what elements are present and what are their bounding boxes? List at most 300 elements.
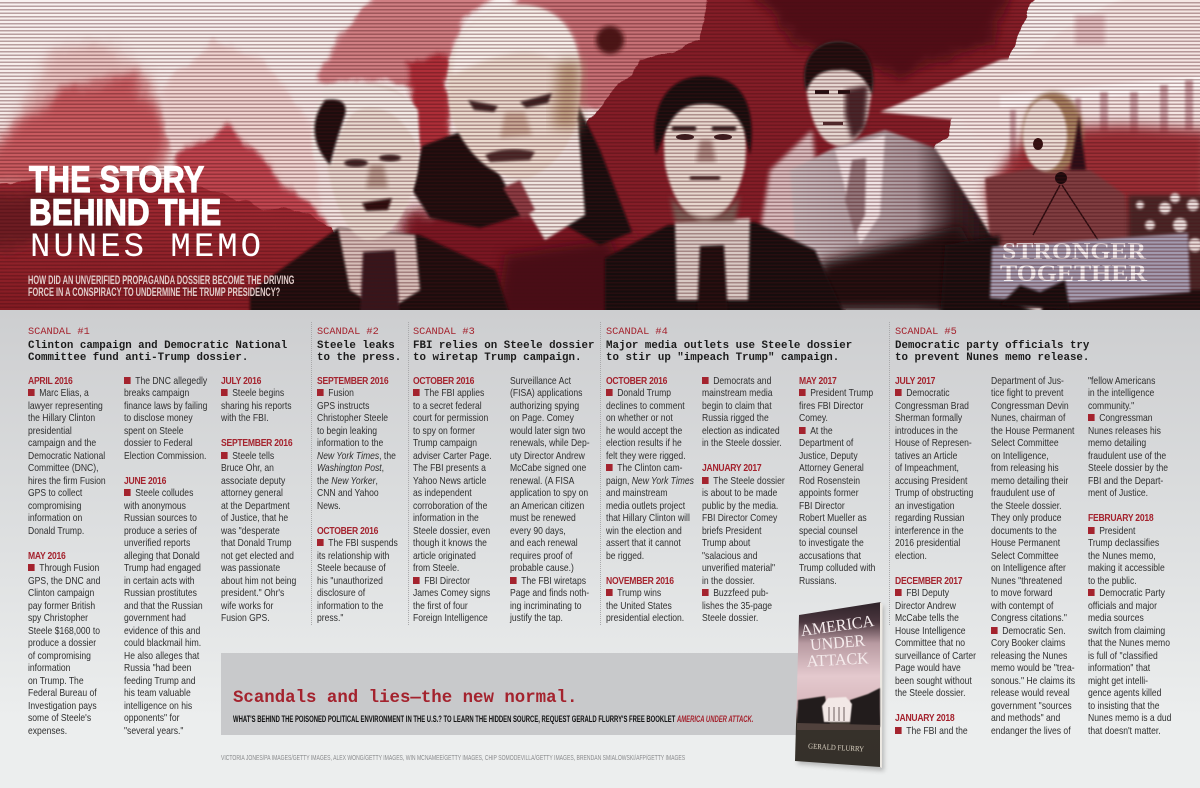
scandal 5 heading [895, 326, 1090, 364]
scandal 3 column 1: Trump campaign [413, 438, 477, 449]
booklet cover: America Under Attack: GERALD FLURRY [808, 742, 865, 753]
scandal 1 column 1: spy Christopher [28, 613, 88, 624]
scandal 5 column 2: Democratic Sen. [1002, 626, 1066, 636]
scandal 2 column: Steele because of [317, 563, 386, 574]
scandal 2 column: Washington Post, [317, 463, 384, 474]
scandal 3 column 1: James Comey signs [413, 588, 490, 599]
scandal 3 column 1: Foreign Intelligence [413, 613, 488, 624]
scandal 1 column 2: Russian sources to [124, 513, 197, 524]
title line: Behind the: BEHIND THE [29, 192, 221, 233]
scandal 5 column 2: sonous." He claims its [991, 676, 1075, 686]
scandal 3 column 2: authorizing spying [510, 400, 579, 412]
scandal 1 column 3: with the FBI. [221, 413, 269, 424]
scandal 1 column 1: expenses. [28, 726, 67, 736]
scandal 3 column 2: Surveillance Act [510, 376, 571, 386]
scandal 4 column 3: At the [810, 426, 833, 436]
scandal 5 column 3: might get intelli- [1088, 676, 1148, 686]
scandal 5 column 3: Nunes memo is a dud [1088, 713, 1171, 724]
scandal 3 column 2: on Page. Comey [510, 413, 574, 424]
scandal 1 column 1: lawyer representing [28, 400, 103, 412]
scandal 4 column 2: Buzzfeed pub- [713, 588, 769, 599]
subtitle [28, 274, 294, 299]
scandal 1 column 3: Steele begins [232, 388, 284, 399]
sign: Stronger Together [990, 233, 1190, 310]
scandal 5 column 1: interference in the [895, 526, 964, 536]
panel: scandal 5 [895, 326, 1171, 736]
scandal 5 column 2: the House Permanent [991, 426, 1074, 436]
scandal 1 column 1: GPS, the DNC and [28, 576, 100, 586]
scandal 5 column 3: Trump declassifies [1088, 538, 1159, 549]
scandal 2 column: press." [317, 613, 343, 624]
scandal 5 column 1: Democratic [906, 388, 950, 399]
scandal 1 heading: Clinton campaign and Democratic National [28, 340, 287, 352]
scandal 5 column 1: House Intelligence [895, 626, 966, 636]
scandal 1 column 2: "several years." [124, 726, 183, 736]
scandal 3 column 2: probable cause.) [510, 563, 574, 574]
scandal 1 heading: Committee fund anti-Trump dossier. [28, 352, 248, 364]
scandal 4 column 2: Russia rigged the [702, 413, 769, 424]
scandal 4 column 2: in the dossier. [702, 576, 755, 586]
scandal 1 column 3: about him not being [221, 576, 296, 586]
scandal 4 column 2: lishes the 35-page [702, 600, 772, 612]
scandal 3 column 1: Steele dossier, even [413, 526, 490, 536]
scandal 5 column 2: with contempt of [991, 600, 1053, 612]
scandal 5 column 3: fraudulent use of the [1088, 450, 1166, 462]
scandal 1 column 3: associate deputy [221, 476, 285, 486]
scandal 4 column 3: to investigate the [799, 538, 864, 549]
scandal 3 column 2: justify the tap. [510, 613, 563, 624]
scandal 5 column 1: introduces in the [895, 426, 958, 436]
white house [757, 0, 1200, 250]
scandal 4 column 1: election results if he [606, 438, 682, 449]
scandal 4 heading: to stir up "impeach Trump" campaign. [606, 352, 839, 364]
scandal 5 column 3: to insisting that the [1088, 700, 1159, 712]
scandal 5 column 1: JANUARY 2018 [895, 713, 954, 724]
scandal 4 column 1: that Hillary Clinton will [606, 513, 690, 524]
scandal 5 column 3: is full of "classified [1088, 650, 1158, 662]
scandal 4 column 2: unverified material" [702, 563, 775, 574]
scandal 4 column 1: be rigged. [606, 550, 644, 562]
scandal 5 column 2: on Intelligence, [991, 450, 1049, 462]
scandal 3 column 2: McCabe signed one [510, 463, 586, 474]
scandal 1 column 3: Bruce Ohr, an [221, 463, 274, 474]
scandal 3 column 1 [413, 376, 492, 624]
scandal 5 column 2: on Intelligence after [991, 563, 1066, 574]
scandal 2 heading: Steele leaks [317, 340, 395, 352]
scandal 5 column 1: Director Andrew [895, 600, 956, 612]
scandal 5 column 3: Nunes releases his [1088, 426, 1161, 436]
scandal 2 column: information to the [317, 600, 383, 612]
scandal 1 column 3: not get elected and [221, 550, 294, 562]
scandal 3 column 2: The FBI wiretaps [521, 576, 586, 586]
scandal 3 column 1: to spy on former [413, 426, 475, 436]
scandal 1 column 3: JULY 2016 [221, 376, 261, 386]
scandal 1 column 2: his team valuable [124, 688, 191, 699]
scandal 4 column 2: Trump about [702, 538, 750, 549]
scandal 2 column: its relationship with [317, 550, 389, 562]
subtitle: HOW DID AN UNVERIFIED PROPAGANDA DOSSIER BECOME THE DRIVING [28, 274, 294, 287]
scandal 5 column 1: regarding Russian [895, 513, 965, 524]
scandal 4 column 1: declines to comment [606, 400, 685, 412]
scandal 1 column 1: Investigation pays [28, 700, 97, 712]
scandal 4 column 3: Justice, Deputy [799, 450, 858, 462]
scandal 4 column 3: Department of [799, 438, 853, 449]
callout: booklet promotion [221, 653, 801, 735]
scandal 4 column 2: "salacious and [702, 550, 757, 562]
scandal 5 column 3: to the public. [1088, 576, 1137, 586]
scandal 3 column 1: corroboration of the [413, 500, 487, 512]
scandal 5 heading: Democratic party officials try [895, 340, 1089, 352]
scandal 5 column 1: of Impeachment, [895, 463, 959, 474]
scandal 5 heading: to prevent Nunes memo release. [895, 352, 1089, 364]
scandal 1 column 1: MAY 2016 [28, 550, 66, 562]
scandal 1 column 2: dossier to Federal [124, 438, 193, 449]
scandal 2 column: The FBI suspends [328, 538, 398, 549]
scandal 5 column 3: memo detailing [1088, 438, 1146, 449]
scandal 5 column 2: from releasing his [991, 463, 1059, 474]
scandal 5 column 1: DECEMBER 2017 [895, 576, 962, 586]
scandal 3 heading: to wiretap Trump campaign. [413, 352, 581, 364]
booklet cover: America Under Attack [795, 602, 886, 773]
scandal 5 column 3: that doesn't matter. [1088, 726, 1161, 736]
scandal 1 column 2: produce a series of [124, 526, 197, 536]
scandal 5 column 2: to move forward [991, 588, 1052, 599]
scandal 3 column 2: application to spy on [510, 488, 588, 499]
scandal 1 column 3: Fusion GPS. [221, 613, 270, 624]
scandal 4 column 2: Democrats and [713, 376, 771, 386]
scandal 4 column 3: FBI Director [799, 500, 845, 512]
scandal 3 column 2: must be renewed [510, 513, 576, 524]
scandal 4 column 2: election as indicated [702, 426, 780, 436]
scandal 5 column 2: and methods" and [991, 713, 1060, 724]
scandal 3 heading: FBI relies on Steele dossier [413, 340, 594, 352]
scandal 2 column: Fusion [328, 388, 354, 399]
scandal 1 column 3: of Justice, that he [221, 513, 288, 524]
callout heading: Scandals and lies—the new normal. [233, 689, 577, 708]
scandal 4 column 2: begin to claim that [702, 400, 772, 412]
scandal 2 column: SEPTEMBER 2016 [317, 376, 388, 386]
scandal 2 column: information to the [317, 438, 383, 449]
scandal 5 column 2: the Steele dossier. [991, 500, 1062, 512]
scandal 5 column 1: House of Represen- [895, 438, 972, 449]
scandal 1 column 1: produce a dossier [28, 638, 96, 649]
scandal 5 column 2: Cory Booker claims [991, 638, 1065, 649]
scandal 5 column 1: the Steele dossier. [895, 688, 966, 699]
subtitle: FORCE IN A CONSPIRACY TO UNDERMINE THE TRUMP PRESIDENCY? [28, 286, 280, 299]
scandal 3 column 1: adviser Carter Page. [413, 450, 492, 462]
scandal 4 column 1: media outlets project [606, 500, 685, 512]
scandal 4 column 3: Attorney General [799, 463, 864, 474]
figure: Hillary Clinton at podium with crowd [985, 92, 1200, 305]
scandal 3 column 1: from Steele. [413, 563, 459, 574]
scandal 4 column 2: public by the media. [702, 500, 778, 512]
scandal 1 column 2: spent on Steele [124, 426, 184, 436]
scandal 5 column 2: memo would be "trea- [991, 663, 1075, 674]
scandal 1 column 3: that Donald Trump [221, 538, 292, 549]
scandal 3 column 2: uty Director Andrew [510, 450, 585, 462]
callout text: WHAT'S BEHIND THE POISONED POLITICAL ENVIRONMENT IN THE U.S.? TO LEARN THE HIDDEN SOURCE, REQUEST GERALD FLURRY'S FREE BOOKLET AMERICA UNDER ATTACK. [233, 713, 753, 724]
scandal 2 heading: SCANDAL #2 [317, 326, 379, 338]
scandal 1 column 2: could blackmail him. [124, 638, 201, 649]
scandal 4 column 1: Donald Trump [617, 388, 671, 399]
scandal 5 column 2: releasing the Nunes [991, 650, 1067, 662]
scandal 5 column 1: Page would have [895, 663, 961, 674]
background washes [0, 0, 1200, 350]
scandal 4 column 1: OCTOBER 2016 [606, 376, 667, 386]
scandal 3 heading: SCANDAL #3 [413, 326, 475, 338]
scandal 3 column 2: (FISA) applications [510, 388, 582, 399]
scandal 5 column 1: surveillance of Carter [895, 650, 976, 662]
scandal 1 column 2: finance laws by failing [124, 400, 207, 412]
scandal 4 column 3 [799, 376, 875, 586]
scandal 1 column 1: Clinton campaign [28, 588, 94, 599]
scandal 1 column 3: was passionate [221, 563, 280, 574]
scandal 3 column 2: renewal. (A FISA [510, 476, 574, 486]
scandal 2 column [317, 376, 398, 624]
scandal 4 column 1: felt they were rigged. [606, 450, 686, 462]
title [28, 159, 264, 267]
scandal 5 column 1: Congressman Brad [895, 400, 969, 412]
scandal 4 column 3: MAY 2017 [799, 376, 837, 386]
scandal 1 column 1: on Trump. The [28, 676, 84, 686]
scandal 4 column 1: and mainstream [606, 488, 667, 499]
scandal 4 column 3: President Trump [810, 388, 873, 399]
title line: The Story: THE STORY [29, 159, 204, 200]
scandal 5 column 2: Nunes, chairman of [991, 413, 1065, 424]
scandal 5 column 3: making it accessible [1088, 563, 1165, 574]
scandal 5 column 3: Democratic Party [1099, 588, 1165, 599]
scandal 5 column 3: information" that [1088, 663, 1150, 674]
scandal 5 column 3: in the intelligence [1088, 388, 1154, 399]
scandal 4 column 3: Comey. [799, 413, 828, 424]
scandal 4 heading: SCANDAL #4 [606, 326, 668, 338]
scandal 1 column 3: at the Department [221, 500, 290, 512]
scandal 4 column 2: mainstream media [702, 388, 773, 399]
hero illustration [0, 0, 1200, 310]
scandal 5 column 2 [991, 376, 1075, 736]
scandal 1 column 2: breaks campaign [124, 388, 189, 399]
scandal 3 column 2: ing incriminating to [510, 600, 581, 612]
scandal 5 column 2: House Permanent [991, 538, 1060, 549]
scandal 4 column 2: briefs President [702, 526, 762, 536]
scandal 5 column 1: election. [895, 550, 927, 562]
scandal 5 column 2: documents to the [991, 526, 1057, 536]
scandal 5 column 1: tatives an Article [895, 450, 957, 462]
panel: scandal 3 [413, 326, 594, 624]
scandal 1 column 2: opponents" for [124, 713, 179, 724]
scandal 5 column 3: FEBRUARY 2018 [1088, 513, 1153, 524]
scandal 1 column 1: Marc Elias, a [39, 388, 89, 399]
scandal 5 column 2: Select Committee [991, 438, 1059, 449]
scandal 1 column 1: GPS to collect [28, 488, 82, 499]
scandal 1 column 1: of compromising [28, 650, 91, 662]
scandal 1 heading: SCANDAL #1 [28, 326, 90, 338]
scandal 5 column 1: accusing President [895, 476, 967, 486]
scandal 4 column 3: Robert Mueller as [799, 513, 867, 524]
sign: Stronger Together: STRONGER [1002, 239, 1147, 265]
scandal 5 column 2: Nunes "threatened [991, 576, 1062, 586]
scandal 5 column 3: that the Nunes memo [1088, 638, 1170, 649]
scandal 2 column: CNN and Yahoo [317, 488, 379, 499]
scandal 1 column 1: some of Steele's [28, 713, 91, 724]
scandal 5 column 3: Steele dossier by the [1088, 463, 1168, 474]
scandal 5 column 1: 2016 presidential [895, 538, 960, 549]
scandal 5 column 3: the Nunes memo, [1088, 550, 1156, 562]
scandal 1 column 1: campaign and the [28, 438, 96, 449]
scandal 4 column 2: The Steele dossier [713, 476, 785, 486]
scandal 2 column: GPS instructs [317, 400, 369, 412]
scandal 1 column 3: Steele tells [232, 450, 274, 462]
scandal 3 column 1: court for permission [413, 413, 488, 424]
photo credits: VICTORIA JONES/PA IMAGES/GETTY IMAGES, ALEX WONG/GETTY IMAGES, WIN MCNAMEE/GETTY IMAGES, CHIP SOMODEVILLA/GETTY IMAGES, BRENDAN SMIALOWSKI/AFP/GETTY IMAGES [221, 753, 685, 762]
scandal 3 heading [413, 326, 594, 364]
scandal 1 column 2: He also alleges that [124, 650, 199, 662]
scandal 5 column 2: endanger the lives of [991, 726, 1071, 736]
scandal 4 column 3: Rod Rosenstein [799, 476, 860, 486]
scandal 5 column 3: President [1099, 526, 1135, 536]
scandal 4 column 1: presidential election. [606, 613, 684, 624]
scandal 5 column 1: been sought without [895, 676, 972, 686]
scandal 3 column 2: renewals, while Dep- [510, 438, 590, 449]
scandal 5 column 2: government "sources [991, 700, 1072, 712]
scandal 1 column 2: intelligence on his [124, 700, 192, 712]
scandal 3 column 1: The FBI presents a [413, 463, 486, 474]
scandal 3 column 1: FBI Director [424, 576, 470, 586]
scandal 4 column 1: The Clinton cam- [617, 463, 682, 474]
scandal 5 column 2: fraudulent use of [991, 488, 1055, 499]
scandal 4 column 1: the United States [606, 600, 672, 612]
scandal 3 column 2: would later sign two [510, 426, 585, 436]
panel: scandal 4 [606, 326, 875, 624]
scandal 1 column 2: with anonymous [124, 500, 186, 512]
scandal 5 column 1: Trump of obstructing [895, 488, 973, 499]
scandal 3 column 1: OCTOBER 2016 [413, 376, 474, 386]
scandal 5 column 3 [1088, 376, 1171, 736]
scandal 3 column 1: The FBI applies [424, 388, 484, 399]
scandal 1 column 2: Steele colludes [135, 488, 193, 499]
scandal 4 heading: Major media outlets use Steele dossier [606, 340, 852, 352]
scandal 3 column 1: to a secret federal [413, 400, 482, 412]
scandal 5 column 1: McCabe tells the [895, 613, 959, 624]
scandal 5 column 1: The FBI and the [906, 726, 968, 736]
scandal 4 column 1: paign, New York Times [606, 476, 694, 486]
scandal 1 column 1: information on [28, 513, 82, 524]
scandal 1 column 1: information [28, 663, 70, 674]
scandal 1 column 3: president." Ohr's [221, 588, 284, 599]
scandal 1 column 2: The DNC allegedly [135, 376, 207, 386]
scandal 4 column 3: special counsel [799, 526, 858, 536]
scandal 5 column 2: tice fight to prevent [991, 388, 1063, 399]
scandal 3 column 2: an American citizen [510, 500, 584, 512]
scandal 2 column: Christopher Steele [317, 413, 388, 424]
scandal 5 column 3: officials and major [1088, 600, 1157, 612]
scandal 2 column: OCTOBER 2016 [317, 526, 378, 536]
scandal 4 column 3: Trump colluded with [799, 563, 875, 574]
scandal 1 column 1: pay former British [28, 600, 95, 612]
scandal 5 column 3: "fellow Americans [1088, 376, 1155, 386]
scandal 1 column 2: Trump had engaged [124, 563, 201, 574]
scandal 1 column 2: in certain acts with [124, 576, 195, 586]
scandal 1 column 3 [221, 376, 296, 624]
scandal 5 column 1: Committee that no [895, 638, 965, 649]
scandal 4 column 1: he would accept the [606, 426, 682, 436]
scandal 2 column: his "unauthorized [317, 576, 383, 586]
scandal 2 heading: to the press. [317, 352, 401, 364]
scandal 5 column 3: Congressman [1099, 413, 1153, 424]
scandal 1 column 3: attorney general [221, 488, 283, 499]
scandal 4 column 2 [702, 376, 785, 624]
scandal 1 column 2: evidence of this and [124, 626, 200, 636]
booklet cover: America Under Attack: ATTACK [806, 648, 869, 671]
scandal 4 column 2: is about to be made [702, 488, 777, 499]
scandal 5 heading: SCANDAL #5 [895, 326, 957, 338]
panel: scandal 2 [317, 326, 401, 624]
scandal 5 column 3: community." [1088, 400, 1134, 412]
scandal 1 column 1: Donald Trump. [28, 526, 84, 536]
title line: Nunes Memo: NUNES MEMO [30, 229, 264, 267]
booklet cover: America Under Attack: AMERICA [799, 611, 875, 640]
scandal 1 column 1: compromising [28, 500, 81, 512]
scandal 1 column 1: Federal Bureau of [28, 688, 97, 699]
scandal 1 heading [28, 326, 287, 364]
scandal 2 column: to begin leaking [317, 426, 377, 436]
scandal 2 column: disclosure of [317, 588, 365, 599]
scandal 5 column 2: Select Committee [991, 550, 1059, 562]
figure: James Comey [605, 76, 845, 315]
scandal 3 column 2: Page and finds noth- [510, 588, 589, 599]
bottom right shadows [940, 235, 1200, 315]
scandal 5 column 2: Department of Jus- [991, 376, 1064, 386]
scandal 1 column 1: presidential [28, 426, 72, 436]
scandal 1 column 1: hires the firm Fusion [28, 476, 106, 486]
scandal 3 column 2 [510, 376, 590, 624]
scandal 3 column 1: Yahoo News article [413, 476, 486, 486]
scandal 1 column 1: Through Fusion [39, 563, 99, 574]
scandal 2 column: News. [317, 500, 341, 512]
scandal 5 column 3: switch from claiming [1088, 626, 1165, 636]
scandal 4 column 1 [606, 376, 694, 624]
scandal 3 column 1: as independent [413, 488, 472, 499]
scandal 4 column 2: in the Steele dossier. [702, 438, 782, 449]
scandal 2 column: the New Yorker, [317, 476, 378, 486]
scandal 5 column 2: Congressman Devin [991, 400, 1069, 412]
scandal 5 column 3: ment of Justice. [1088, 488, 1148, 499]
scandal 5 column 2: Congress citations." [991, 613, 1067, 624]
scandal 5 column 1 [895, 376, 976, 736]
figure: Donald Trump [412, 5, 632, 245]
scandal 1 column 1: Steele $168,000 to [28, 626, 100, 636]
scandal 3 column 1: though it knows the [413, 538, 487, 549]
scandal 4 column 1: win the election and [606, 526, 682, 536]
scandal 1 column 2: Russia "had been [124, 663, 191, 674]
figure: Devin Nunes [790, 41, 1005, 312]
scandal 1 column 2: JUNE 2016 [124, 476, 166, 486]
figure: Christopher Steele [250, 84, 510, 315]
scandal 3 column 1: article originated [413, 550, 476, 562]
scandal 4 column 1: on whether or not [606, 413, 673, 424]
scandal 5 column 2: release would reveal [991, 688, 1070, 699]
scandal 2 heading [317, 326, 401, 364]
scandal 5 column 3: FBI and the Depart- [1088, 476, 1163, 486]
scandal 4 column 1: Trump wins [617, 588, 661, 599]
booklet cover: America Under Attack: UNDER [809, 631, 866, 654]
scandal 3 column 1: the first of four [413, 600, 468, 612]
scandal 1 column 3: sharing his reports [221, 400, 292, 412]
scandal 5 column 1: FBI Deputy [906, 588, 949, 599]
scandal 1 column 2: Russian prostitutes [124, 588, 197, 599]
scandal 1 column 2: Election Commission. [124, 450, 206, 462]
scandal 1 column 1: APRIL 2016 [28, 376, 73, 386]
